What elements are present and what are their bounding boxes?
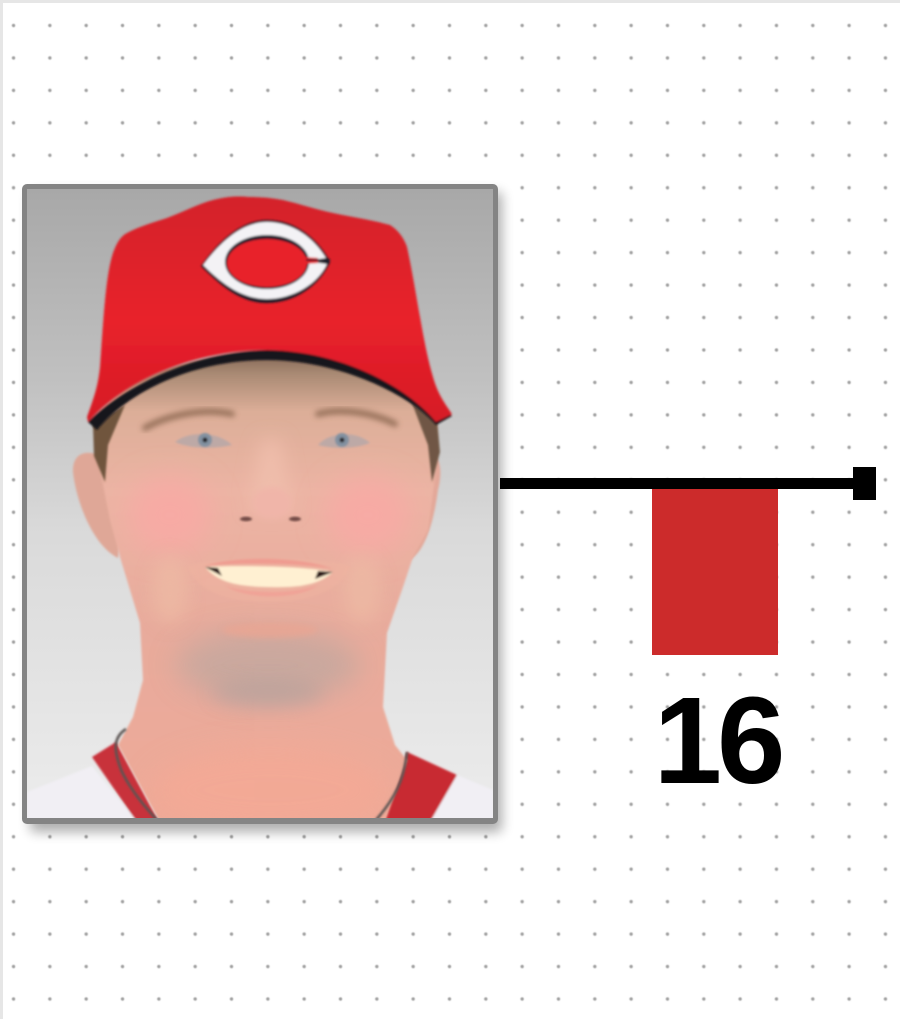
nose xyxy=(240,517,301,521)
eyes xyxy=(175,433,370,448)
jersey xyxy=(27,742,493,822)
Reds C logo xyxy=(201,220,330,303)
player photo panel xyxy=(22,184,502,832)
red value bar xyxy=(652,489,778,655)
ear right xyxy=(412,460,442,559)
hair sides xyxy=(93,403,440,482)
face shading xyxy=(138,446,400,718)
smile xyxy=(206,558,332,595)
face and neck xyxy=(100,354,437,822)
value label: 16 xyxy=(654,673,781,810)
ear left xyxy=(73,453,125,558)
player portrait xyxy=(27,196,493,832)
necklace xyxy=(116,729,407,820)
eyebrows xyxy=(145,411,395,428)
connector line with end cap xyxy=(500,467,876,500)
cap xyxy=(87,196,452,430)
